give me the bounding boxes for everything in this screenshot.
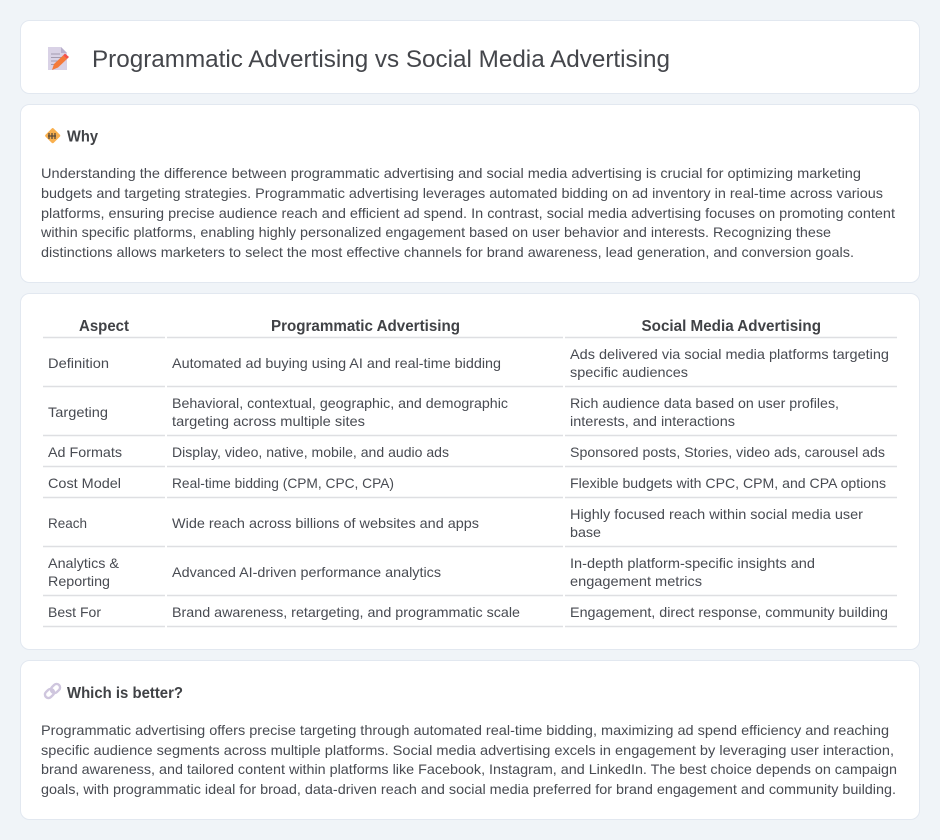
table header row: Programmatic Advertising [271, 318, 460, 335]
row: targeting: interests, and interactions [570, 413, 735, 429]
row: targeting: Rich audience data based on user profiles, [570, 395, 839, 411]
row: ad formats [48, 444, 885, 460]
row: best for: Brand awareness, retargeting, and programmatic scale [172, 604, 520, 620]
row: definition: Definition [48, 355, 109, 371]
row: analytics and reporting: engagement metrics [570, 573, 702, 589]
heading: which is better: Which is better? [67, 685, 183, 702]
row: analytics and reporting: Reporting [48, 573, 110, 589]
row: targeting: Behavioral, contextual, geographic, and demographic [172, 395, 508, 411]
row: ad formats: Sponsored posts, Stories, video ads, carousel ads [570, 444, 885, 460]
row: cost model: Flexible budgets with CPC, CPM, and CPA options [570, 475, 886, 491]
panel: why [20, 104, 920, 282]
text block: which is better paragraph: specific audience segments across multiple platforms. Social media advertising excels in engagement by leveraging user interaction, [41, 742, 894, 758]
icon: diamond sign [45, 128, 61, 144]
heading: why: Why [67, 128, 98, 146]
title: Programmatic Advertising vs Social Media Advertising [92, 46, 670, 73]
row: definition: Automated ad buying using AI and real-time bidding [172, 355, 501, 371]
row: best for [48, 604, 888, 620]
text block: which is better paragraph [41, 722, 897, 797]
row: cost model: Real-time bidding (CPM, CPC, CPA) [172, 475, 394, 491]
row: ad formats: Ad Formats [48, 444, 122, 460]
row: analytics and reporting: Analytics & [48, 555, 120, 571]
text block: why paragraph: budgets and targeting strategies. Programmatic advertising leverages automated bidding on ad inventory in real-time across various [41, 185, 883, 201]
row: definition: specific audiences [570, 364, 688, 380]
text block: why paragraph: distinctions allows marketers to select the most effective channels for brand awareness, lead generation, and conversion goals. [41, 244, 854, 260]
text block: why paragraph [40, 165, 895, 260]
row: reach: Wide reach across billions of websites and apps [172, 515, 479, 531]
row: cost model: Cost Model [48, 475, 121, 491]
text block: why paragraph: Understanding the difference between programmatic advertising and social media advertising is crucial for optimizing marketing [41, 165, 861, 181]
row: reach: base [570, 524, 601, 540]
table header row: Social Media Advertising [642, 318, 821, 335]
text block: why paragraph: platforms, ensuring precise audience reach and efficient ad spend. In contrast, social media advertising focuses on promoting content [41, 205, 895, 221]
icon: document with pencil [48, 47, 69, 70]
icon: chain link [43, 682, 62, 700]
row: analytics and reporting [48, 555, 815, 589]
panel: title header [20, 20, 920, 94]
text block: which is better paragraph: brand awareness, and tailored content within platforms like Facebook, Instagram, and LinkedIn. The best choice depends on campaign [41, 761, 897, 777]
row: analytics and reporting: In-depth platform-specific insights and [570, 555, 815, 571]
row: best for: Engagement, direct response, community building [570, 604, 888, 620]
panel: which is better [20, 660, 920, 820]
text block: why paragraph: within specific platforms, enabling highly personalized engagement based on user behavior and interests. Recognizing these [40, 224, 831, 240]
panel: comparison table [20, 294, 920, 650]
row: targeting [48, 395, 839, 429]
row: ad formats: Display, video, native, mobile, and audio ads [172, 444, 449, 460]
row: definition [48, 346, 889, 380]
table grid lines [43, 338, 897, 626]
row: reach: Reach [48, 515, 87, 531]
text block: which is better paragraph: Programmatic advertising offers precise targeting through automated real-time bidding, maximizing ad spend efficiency and reaching [41, 722, 889, 738]
row: targeting: Targeting [48, 404, 108, 420]
table header row: Aspect [79, 318, 130, 335]
table header row [79, 318, 821, 335]
row: targeting: targeting across multiple sites [172, 413, 365, 429]
row: reach [48, 506, 863, 540]
row: cost model [48, 475, 886, 491]
text block: which is better paragraph: goals, with programmatic ideal for broad, data-driven reach and social media preferred for brand engagement and community building. [41, 781, 896, 797]
row: best for: Best For [48, 604, 101, 620]
row: definition: Ads delivered via social media platforms targeting [570, 346, 889, 362]
row: analytics and reporting: Advanced AI-driven performance analytics [172, 564, 441, 580]
row: reach: Highly focused reach within social media user [570, 506, 863, 522]
